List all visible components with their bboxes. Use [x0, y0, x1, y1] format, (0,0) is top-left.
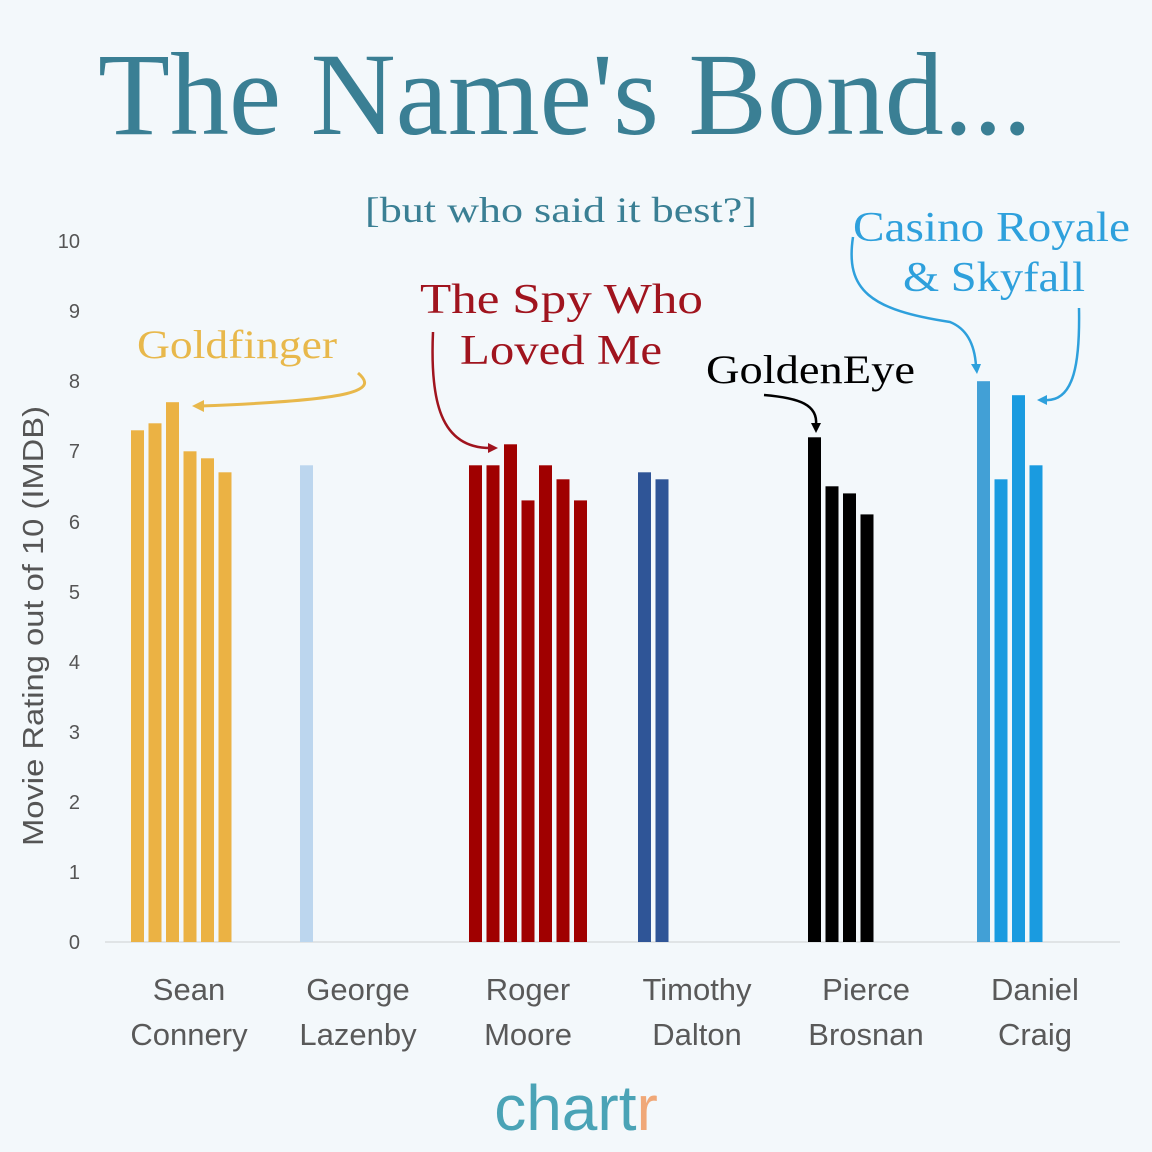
y axis tick labels: 9: [69, 301, 80, 323]
y axis tick labels: 4: [69, 652, 80, 674]
bars: Daniel Craig: [977, 381, 1042, 942]
category labels: Moore: [484, 1017, 572, 1052]
category labels: Dalton: [652, 1017, 742, 1052]
annotation: GoldenEye: [706, 347, 915, 433]
annotation: The Spy Who Loved Me: Loved Me: [460, 328, 662, 374]
y axis tick labels: 3: [69, 722, 80, 744]
annotation: The Spy Who Loved Me: The Spy Who: [420, 277, 703, 323]
y axis tick labels: 2: [69, 792, 80, 814]
annotation: GoldenEye: GoldenEye: [706, 347, 915, 392]
annotation: Casino Royale & Skyfall: Casino Royale: [853, 205, 1130, 251]
category labels: Connery: [130, 1017, 248, 1052]
category labels: Pierce: [822, 972, 910, 1007]
bars: Pierce Brosnan: [808, 437, 874, 942]
subtitle: [but who said it best?]: [365, 190, 757, 230]
y axis tick labels: 5: [69, 582, 80, 604]
category labels: Lazenby: [299, 1017, 417, 1052]
y axis title: Movie Rating out of 10 (IMDB): [18, 406, 50, 846]
bars: Timothy Dalton: [638, 472, 668, 942]
y axis tick labels: 8: [69, 371, 80, 393]
annotation: The Spy Who Loved Me: [420, 277, 703, 453]
bars: George Lazenby: [300, 465, 313, 942]
annotation: Casino Royale & Skyfall: [852, 205, 1130, 405]
category labels: Craig: [998, 1017, 1072, 1052]
logo: chartr: chartr: [494, 1072, 658, 1144]
category labels: Roger: [486, 972, 570, 1007]
y axis tick labels: 1: [69, 862, 80, 884]
y axis tick labels: 6: [69, 512, 80, 534]
category labels: Daniel: [991, 972, 1079, 1007]
category labels: Timothy: [642, 972, 752, 1007]
y axis tick labels: 10: [58, 231, 80, 253]
y axis tick labels: 7: [69, 441, 80, 463]
bars: Sean Connery: [131, 402, 232, 942]
annotation: Goldfinger: [137, 322, 365, 412]
category labels: [130, 972, 1079, 1052]
annotation: Casino Royale & Skyfall: & Skyfall: [903, 255, 1085, 301]
category labels: Sean: [153, 972, 225, 1007]
title: The Name's Bond...: [98, 29, 1032, 160]
category labels: George: [306, 972, 410, 1007]
category labels: Brosnan: [808, 1017, 924, 1052]
annotation: Goldfinger: Goldfinger: [137, 322, 337, 367]
bars: Roger Moore: [469, 444, 587, 942]
y axis tick labels: [58, 231, 80, 954]
y axis tick labels: 0: [69, 932, 80, 954]
